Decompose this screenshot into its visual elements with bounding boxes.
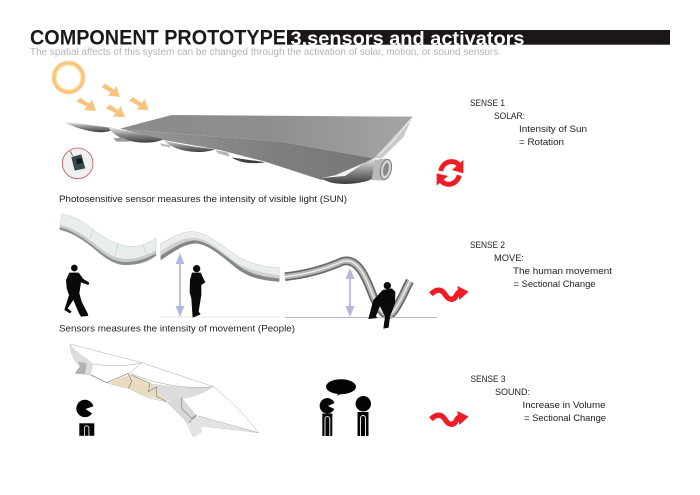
subtitle: The spatial affects of this system can be changed through the activation of solar, motion, or sound sensors. — [30, 47, 501, 58]
text block: sense 3: SENSE 3 — [470, 373, 506, 384]
silhouette: seated person — [368, 282, 395, 329]
heading bar — [287, 30, 670, 45]
text block: sense 3: Increase in Volume — [522, 399, 606, 410]
ribbon: bench seat state — [285, 261, 410, 315]
tan panel — [108, 374, 167, 401]
ground lines — [160, 316, 437, 318]
text block: sense 1: SENSE 1 — [470, 97, 505, 108]
caption: movement: Sensors measures the intensity of movement (People) — [59, 322, 295, 334]
wing right edge — [374, 117, 413, 158]
wing end hub — [372, 158, 392, 181]
text block: sense 1: SOLAR: — [494, 110, 525, 121]
icon: red squiggle arrow, sense 3 — [431, 411, 469, 425]
silhouette: walking person — [64, 265, 89, 317]
text block: sense 3 — [470, 373, 606, 423]
icon: red rotation arrows — [437, 160, 463, 186]
arrow: height change mid — [176, 253, 184, 317]
text block: sense 1 — [470, 97, 587, 147]
wing pods — [64, 122, 113, 132]
icon: red squiggle arrow, sense 2 — [431, 286, 469, 300]
ribbon: bench raised state — [60, 214, 156, 265]
icon: listener head and body — [76, 400, 94, 436]
icon: sun — [52, 60, 86, 94]
wing top surface — [120, 115, 413, 158]
outer shell — [70, 344, 258, 437]
title: component prototype: COMPONENT PROTOTYPE — [30, 26, 286, 50]
text block: sense 2 — [470, 239, 612, 289]
grey panel mid — [150, 383, 213, 401]
text block: sense 3: SOUND: — [495, 386, 530, 397]
text block: sense 2: The human movement — [513, 265, 612, 276]
heading: sensors and activators: 3.sensors and activators — [290, 28, 525, 50]
grey panel tail — [188, 416, 258, 437]
grey panel lower — [167, 397, 197, 423]
text block: sense 2: = Sectional Change — [514, 278, 596, 289]
wing: solar rotating component — [64, 115, 413, 184]
icon: second person — [356, 396, 371, 436]
icon: photosensitive sensor — [62, 148, 93, 179]
seams — [91, 373, 197, 423]
text block: sense 1: Intensity of Sun — [519, 123, 587, 134]
arrows: sunlight — [77, 83, 149, 117]
ribbon: bench mid state — [161, 232, 279, 282]
grey panel left — [70, 344, 93, 375]
text block: sense 1: = Rotation — [519, 136, 564, 147]
text block: sense 2: MOVE: — [494, 252, 524, 263]
icon: speaker with speech bubble — [320, 379, 356, 436]
text block: sense 2: SENSE 2 — [470, 239, 505, 250]
arrow: height change seat — [346, 268, 354, 317]
wing lower surface — [120, 129, 374, 180]
text block: sense 3: = Sectional Change — [524, 412, 606, 423]
silhouette: standing person — [190, 265, 205, 318]
caption: solar: Photosensitive sensor measures the intensity of visible light (SUN) — [59, 193, 347, 204]
wing outline: sound responsive component — [70, 344, 258, 437]
